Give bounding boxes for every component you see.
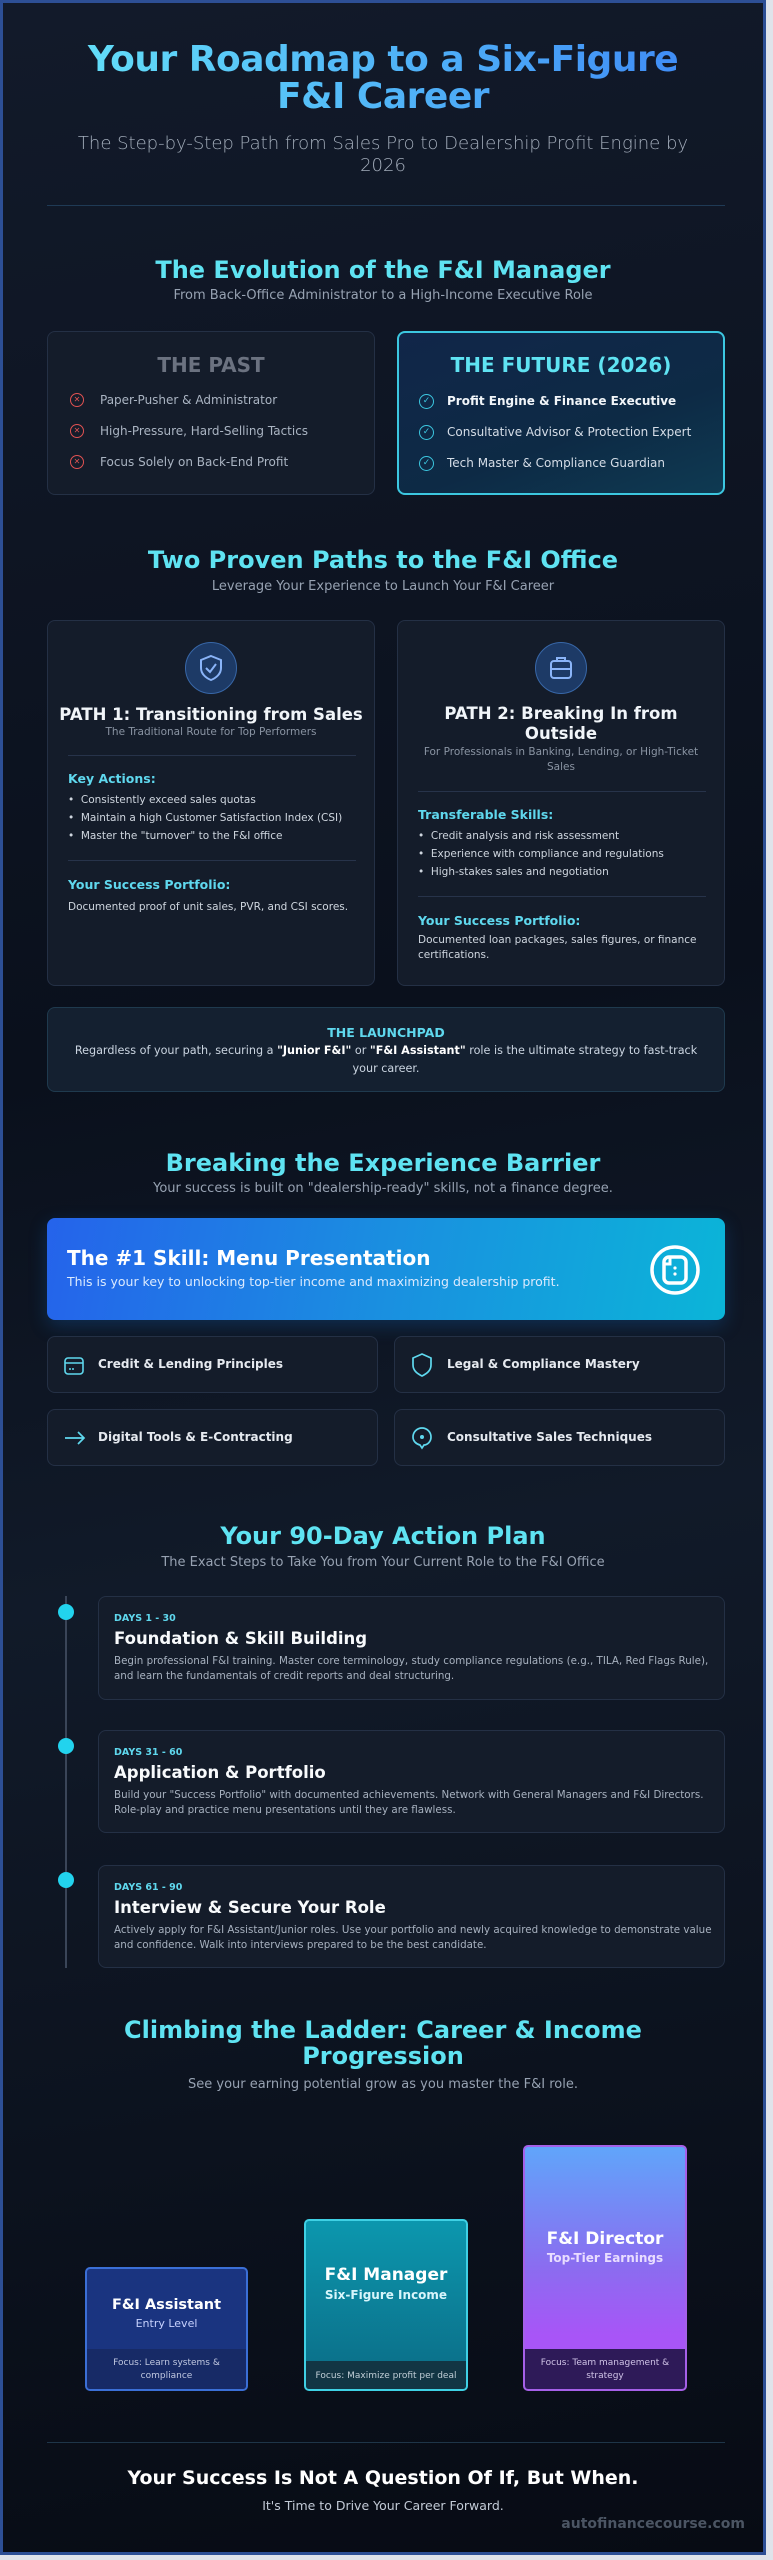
past items: ✕ <box>74 395 80 404</box>
step 2: Build your "Success Portfolio" with documented achievements. Network with General Managers and F&I Directors. Role-play and practice menu presentations until they are flawless. <box>114 1789 703 1816</box>
step 3 <box>98 1865 725 1968</box>
panel: path 2 <box>397 620 725 986</box>
subheading: two paths: Leverage Your Experience to Launch Your F&I Career <box>212 579 554 594</box>
future items: ✓ <box>423 458 430 468</box>
panel: path 1 <box>47 620 375 986</box>
future items: ✓ <box>423 396 430 406</box>
step 2 <box>98 1730 725 1833</box>
icon: menu <box>650 1245 700 1295</box>
path 2 title: PATH 2: Breaking In from Outside <box>444 704 678 743</box>
heading: experience barrier: Breaking the Experience Barrier <box>166 1149 600 1177</box>
tier: assistant <box>85 2267 248 2391</box>
key actions <box>68 771 342 842</box>
tier: director <box>523 2145 687 2391</box>
timeline line <box>65 1596 67 1968</box>
tier: director: strategy <box>586 2371 624 2381</box>
skill: digital <box>47 1409 378 1466</box>
past items: Focus Solely on Back-End Profit <box>100 455 288 469</box>
tier: assistant: Entry Level <box>136 2317 197 2330</box>
skill: consultative: Consultative Sales Techniques <box>447 1430 652 1444</box>
future items: Consultative Advisor & Protection Expert <box>447 425 691 439</box>
key actions: • Consistently exceed sales quotas <box>68 794 256 806</box>
future items <box>419 394 692 471</box>
panel: the past <box>47 331 375 495</box>
title: Your Roadmap to a Six-Figure F&I Career <box>88 39 678 117</box>
tier: assistant: compliance <box>141 2371 192 2381</box>
subtitle: The Step-by-Step Path from Sales Pro to Dealership Profit Engine by 2026 <box>78 133 688 176</box>
future heading: THE FUTURE (2026) <box>451 353 671 377</box>
timeline dot 3 <box>58 1872 74 1888</box>
success portfolio 1: Documented proof of unit sales, PVR, and CSI scores. <box>68 901 348 913</box>
step 3: Interview & Secure Your Role <box>114 1898 386 1917</box>
subheading: barrier: Your success is built on "dealership-ready" skills, not a finance degree. <box>153 1181 613 1196</box>
future items: Profit Engine & Finance Executive <box>447 394 676 408</box>
step 1: Begin professional F&I training. Master core terminology, study compliance regulations (e.g., TILA, Red Flags Rule), and learn the fundamentals of credit reports and deal structuring. <box>114 1655 708 1682</box>
success portfolio 1 <box>68 877 348 913</box>
tier: assistant: F&I Assistant <box>112 2297 221 2313</box>
tier: director: Focus: Team management & <box>541 2358 669 2368</box>
step 3: Actively apply for F&I Assistant/Junior roles. Use your portfolio and newly acquired knowledge to demonstrate value and confidence. Walk into interviews prepared to be the best candidate. <box>114 1924 712 1951</box>
past items: ✕ <box>74 457 80 466</box>
tier: director: F&I Director <box>547 2229 663 2249</box>
success portfolio 2: Your Success Portfolio: <box>418 913 580 928</box>
skill: credit <box>47 1336 378 1393</box>
step 2: DAYS 31 - 60 <box>114 1747 182 1758</box>
transferable skills: Transferable Skills: <box>418 807 553 822</box>
callout: launchpad <box>47 1007 725 1092</box>
panel: #1 skill <box>47 1218 725 1320</box>
past items: High-Pressure, Hard-Selling Tactics <box>100 424 308 438</box>
skill: credit: Credit & Lending Principles <box>98 1357 283 1371</box>
transferable skills: • Credit analysis and risk assessment <box>418 830 619 842</box>
transferable skills <box>418 807 664 878</box>
tier: assistant: Focus: Learn systems & <box>113 2358 220 2368</box>
past heading: THE PAST <box>157 353 265 377</box>
success portfolio 2 <box>418 913 696 961</box>
tier: manager <box>304 2219 468 2391</box>
tier: manager: F&I Manager <box>325 2265 447 2285</box>
panel: the future <box>397 331 725 495</box>
tier: director: Top-Tier Earnings <box>547 2251 663 2265</box>
path 2 subtitle: For Professionals in Banking, Lending, or High-Ticket Sales <box>424 746 698 773</box>
step 1 <box>98 1596 725 1700</box>
tier: manager: Focus: Maximize profit per deal <box>316 2371 456 2381</box>
key actions: • Maintain a high Customer Satisfaction Index (CSI) <box>68 812 342 824</box>
skill: legal: Legal & Compliance Mastery <box>447 1357 640 1371</box>
footer url: autofinancecourse.com <box>561 2516 745 2532</box>
step 1: DAYS 1 - 30 <box>114 1613 176 1624</box>
footer headline: Your Success Is Not A Question Of If, But When. <box>127 2467 639 2489</box>
subheading: evolution: From Back-Office Administrator to a High-Income Executive Role <box>173 288 593 303</box>
callout: launchpad: Regardless of your path, securing a "Junior F&I" or "F&I Assistant" role is the ultimate strategy to fast-track your career. <box>75 1044 697 1075</box>
path 1 subtitle: The Traditional Route for Top Performers <box>106 726 316 738</box>
skill: digital: Digital Tools & E-Contracting <box>98 1430 293 1444</box>
heading: evolution: The Evolution of the F&I Manager <box>155 256 611 284</box>
timeline dot 2 <box>58 1738 74 1754</box>
callout: launchpad: THE LAUNCHPAD <box>327 1025 445 1040</box>
panel: #1 skill: This is your key to unlocking top-tier income and maximizing dealership profit. <box>67 1274 560 1289</box>
step 2: Application & Portfolio <box>114 1763 326 1782</box>
step 3: DAYS 61 - 90 <box>114 1882 182 1893</box>
icon: briefcase <box>535 642 587 694</box>
key actions: Key Actions: <box>68 771 156 786</box>
heading: ladder: Climbing the Ladder: Career & Income Progression <box>124 2016 642 2070</box>
success portfolio 1: Your Success Portfolio: <box>68 877 230 892</box>
key actions: • Master the "turnover" to the F&I office <box>68 830 283 842</box>
tier: manager: Six-Figure Income <box>325 2288 447 2302</box>
past items <box>70 393 308 469</box>
past items: Paper-Pusher & Administrator <box>100 393 277 407</box>
future items: ✓ <box>423 427 430 437</box>
transferable skills: • High-stakes sales and negotiation <box>418 866 609 878</box>
timeline dot 1 <box>58 1604 74 1620</box>
skill: consultative <box>394 1409 725 1466</box>
past items: ✕ <box>74 426 80 435</box>
footer subline: It's Time to Drive Your Career Forward. <box>262 2498 504 2513</box>
transferable skills: • Experience with compliance and regulations <box>418 848 664 860</box>
panel: #1 skill: The #1 Skill: Menu Presentation <box>67 1246 430 1270</box>
success portfolio 2: Documented loan packages, sales figures, or finance certifications. <box>418 934 696 961</box>
step 1: Foundation & Skill Building <box>114 1629 367 1648</box>
future items: Tech Master & Compliance Guardian <box>447 456 665 470</box>
skill: legal <box>394 1336 725 1393</box>
heading: 90-day plan: Your 90-Day Action Plan <box>220 1522 546 1550</box>
subheading: plan: The Exact Steps to Take You from Your Current Role to the F&I Office <box>161 1555 605 1570</box>
subheading: ladder: See your earning potential grow as you master the F&I role. <box>188 2077 578 2092</box>
icon: shield <box>185 642 237 694</box>
heading: two paths: Two Proven Paths to the F&I Office <box>148 546 618 574</box>
path 1 title: PATH 1: Transitioning from Sales <box>59 705 363 724</box>
